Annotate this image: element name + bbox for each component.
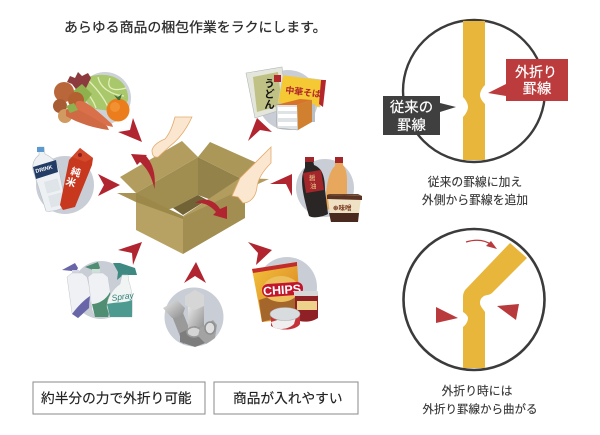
caption: top diagram (422, 175, 528, 207)
label: outer-fold crease: 外折り (515, 64, 557, 80)
product: noodles: うどん (263, 78, 275, 110)
arrow: front flap fold (195, 200, 227, 219)
product: sauces and miso: ⊛味噌 (333, 203, 352, 212)
benefit box: half force (33, 382, 205, 414)
label: conventional crease: 従来の (390, 99, 433, 116)
diagram: crease lines circle (383, 20, 568, 162)
icon: left hand (152, 117, 192, 157)
product: chips and canned food (252, 257, 318, 330)
caption: top diagram: 従来の罫線に加え (428, 175, 522, 189)
label: conventional crease (383, 96, 456, 135)
product: detergent bottles (62, 261, 137, 319)
label: conventional crease: 罫線 (397, 117, 426, 134)
diagram: folded crease circle (404, 229, 544, 370)
arrow: from vegetables (118, 118, 142, 142)
caption: bottom diagram (422, 384, 538, 416)
label: outer-fold crease: 罫線 (523, 80, 552, 98)
arrow: fold direction (466, 240, 497, 249)
illustration: cardboard box with hands (117, 117, 271, 254)
crease strip (463, 21, 485, 160)
product: detergent bottles: Spray (111, 290, 135, 303)
arrow: right pressure (497, 304, 519, 320)
benefit box: half force: 約半分の力で外折り可能 (41, 391, 192, 406)
caption: top diagram: 外側から罫線を追加 (422, 193, 528, 207)
label: outer-fold crease (488, 59, 568, 101)
arrow: from chips (248, 242, 272, 265)
arrow: from detergent (118, 242, 142, 265)
arrow: from sauces (270, 174, 292, 196)
folded strip (463, 243, 527, 368)
benefit box: easy loading: 商品が入れやすい (233, 391, 343, 406)
caption: bottom diagram: 外折り時には (442, 384, 513, 398)
arrow: left pressure (436, 307, 458, 323)
product: noodles (246, 67, 326, 130)
arrow: from bolts (184, 262, 206, 283)
product: sauces and miso: 油 (310, 181, 316, 190)
product: bottle and carton: 米 (64, 174, 78, 190)
product: sauces and miso (296, 157, 362, 222)
product: chips and canned food: CHIPS (263, 282, 302, 298)
product: bolts and nuts (163, 288, 224, 347)
benefit box: easy loading (214, 382, 358, 414)
icon: right hand (232, 147, 271, 203)
product: bottle and carton: DRINK (35, 165, 53, 175)
product: vegetables (53, 72, 131, 130)
product: noodles: 中華そば (285, 84, 322, 99)
arrow: from noodles (248, 118, 272, 141)
product: bottle and carton (33, 147, 94, 214)
product: bottle and carton: 純 (69, 164, 83, 180)
arrow: from bottles (98, 174, 120, 196)
product: sauces and miso: 醤 (309, 173, 316, 182)
caption: bottom diagram: 外折り罫線から曲がる (422, 402, 538, 416)
title: あらゆる商品の梱包作業をラクにします。 (64, 19, 327, 35)
arrow: left flap fold (131, 154, 155, 189)
